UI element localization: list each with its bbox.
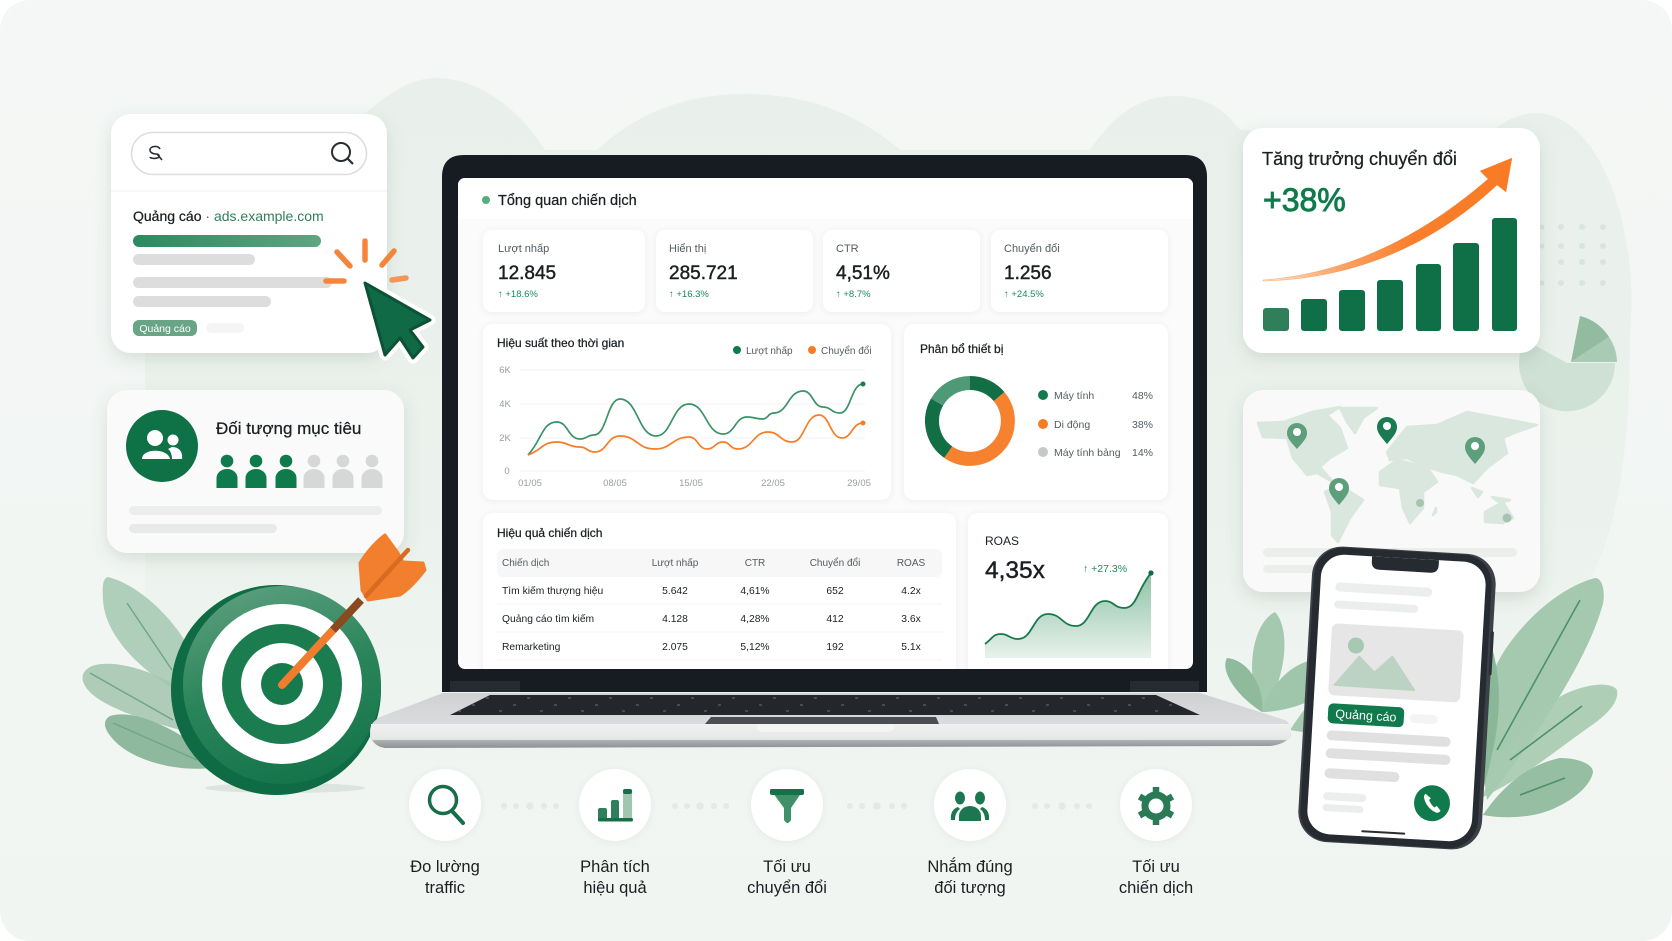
phone ad tag: Quảng cáo xyxy=(1335,707,1397,724)
panel: conversion growth xyxy=(1243,128,1540,353)
table rows: 4.2x xyxy=(901,586,922,597)
KPI: CTR: CTR xyxy=(836,243,859,255)
step: right audience: đối tượng xyxy=(934,879,1006,897)
orange line xyxy=(528,415,866,455)
table header: CTR xyxy=(745,558,765,569)
arrow: growth trend xyxy=(1263,158,1512,281)
table rows: Tìm kiếm thượng hiệu xyxy=(502,585,603,597)
KPI: impressions: ↑ +16.3% xyxy=(669,289,709,300)
axis labels xyxy=(499,365,871,489)
axis labels: 29/05 xyxy=(847,478,871,489)
table rows: 412 xyxy=(826,614,844,625)
icon: magnifier xyxy=(430,786,463,823)
KPI: conversions: 1.256 xyxy=(1004,263,1052,284)
laptop base xyxy=(370,693,1291,748)
table header: ROAS xyxy=(897,558,925,569)
KPI: CTR xyxy=(831,244,972,312)
panel: search ad xyxy=(111,114,387,353)
donut panel: Phân bổ thiết bị xyxy=(920,342,1003,356)
donut legend: 48% xyxy=(1132,390,1153,402)
line chart panel xyxy=(492,337,882,500)
dart xyxy=(282,535,425,685)
KPI: conversions: ↑ +24.5% xyxy=(1004,289,1044,300)
green line xyxy=(528,382,866,455)
step: analyse: Phân tích xyxy=(580,858,650,876)
step: measure traffic: Đo lường xyxy=(410,858,480,876)
chart legend: Lượt nhấp xyxy=(746,345,793,357)
step: optimise campaign: chiến dịch xyxy=(1119,879,1193,897)
table rows: 3.6x xyxy=(901,614,922,625)
chart legend: Chuyển đổi xyxy=(821,345,872,357)
phone image placeholder xyxy=(1328,623,1464,703)
KPI: clicks xyxy=(491,244,637,312)
table rows xyxy=(502,585,922,653)
ad tag xyxy=(133,320,244,336)
KPI: impressions xyxy=(664,243,805,312)
growth title: Tăng trưởng chuyển đổi xyxy=(1262,149,1457,169)
laptop lid xyxy=(442,155,1207,692)
connector dots xyxy=(501,802,1092,810)
donut chart xyxy=(932,383,1008,459)
icon: people xyxy=(951,792,989,821)
step: optimise conversion xyxy=(747,769,827,897)
dashboard screen xyxy=(458,178,1193,683)
icon: cursor arrow xyxy=(365,283,430,358)
growth bars xyxy=(1263,218,1517,331)
KPI: clicks: 12.845 xyxy=(498,263,556,284)
line chart panel: Hiệu suất theo thời gian xyxy=(497,336,624,350)
right big leaves xyxy=(1476,578,1617,817)
icon: gear xyxy=(1140,787,1172,825)
right small leaves xyxy=(1225,612,1320,735)
table header: Lượt nhấp xyxy=(652,557,699,569)
step: analyse xyxy=(579,769,651,897)
table header: Chuyển đổi xyxy=(810,557,860,569)
donut legend xyxy=(1038,390,1153,459)
phone home bar xyxy=(1361,830,1405,835)
table rows: 5.1x xyxy=(901,642,922,653)
icon: audience xyxy=(126,410,198,482)
donut legend: Di động xyxy=(1054,419,1090,431)
table header xyxy=(502,558,925,568)
step: optimise campaign: Tối ưu xyxy=(1132,858,1180,876)
audience people xyxy=(216,455,382,488)
table rows: Quảng cáo tìm kiếm xyxy=(502,613,594,625)
map continents xyxy=(1258,407,1537,542)
table rows: Remarketing xyxy=(502,642,561,653)
KPI: CTR: ↑ +8.7% xyxy=(836,289,871,300)
table rows: 4,28% xyxy=(740,614,770,625)
ROAS panel xyxy=(984,536,1154,658)
icon: call button xyxy=(1413,784,1451,822)
ROAS panel: ROAS xyxy=(985,534,1019,548)
map pins xyxy=(1287,417,1512,522)
step: right audience: Nhắm đúng xyxy=(927,857,1013,876)
ROAS panel: ↑ +27.3% xyxy=(1083,563,1127,575)
ROAS sparkline xyxy=(985,570,1154,658)
table rows: 5,12% xyxy=(740,642,770,653)
step: right audience xyxy=(927,769,1013,897)
panel: target audience xyxy=(107,390,404,553)
axis labels: 22/05 xyxy=(761,478,785,489)
axis labels: 2K xyxy=(499,433,511,444)
icon: bars xyxy=(598,789,633,822)
ad lines xyxy=(133,235,332,307)
icon: click sparks xyxy=(326,241,406,281)
campaign table: Hiệu quả chiến dịch xyxy=(497,526,602,540)
donut legend: Máy tính bảng xyxy=(1054,447,1121,459)
axis labels: 08/05 xyxy=(603,478,627,489)
phone xyxy=(1297,545,1498,851)
target board xyxy=(171,585,381,795)
axis labels: 15/05 xyxy=(679,478,703,489)
growth value: +38% xyxy=(1263,182,1346,218)
ROAS panel: 4,35x xyxy=(985,557,1045,584)
KPI: impressions: 285.721 xyxy=(669,263,738,284)
donut legend: Máy tính xyxy=(1054,390,1094,402)
table rows: 5.642 xyxy=(662,586,688,597)
KPI: CTR: 4,51% xyxy=(836,263,890,284)
KPI: conversions xyxy=(999,243,1160,312)
axis labels: 0 xyxy=(504,466,510,477)
audience title: Đối tượng mục tiêu xyxy=(216,419,361,438)
step: optimise conversion: chuyển đổi xyxy=(747,879,827,897)
table rows: 2.075 xyxy=(662,642,688,653)
step: optimise campaign xyxy=(1119,769,1193,897)
map lines xyxy=(1263,548,1517,573)
table rows: 4,61% xyxy=(740,586,770,597)
KPI: clicks: Lượt nhấp xyxy=(498,243,549,255)
KPI: impressions: Hiển thị xyxy=(669,243,706,255)
left leaves xyxy=(82,577,215,769)
icon: target with dart xyxy=(171,535,425,795)
table header: Chiến dịch xyxy=(502,557,549,569)
dashboard header: Tổng quan chiến dịch xyxy=(498,193,637,209)
table rows: 652 xyxy=(826,586,844,597)
step: measure traffic: traffic xyxy=(425,879,465,897)
campaign table xyxy=(498,527,925,652)
KPI: clicks: ↑ +18.6% xyxy=(498,289,538,300)
ad tag: Quảng cáo xyxy=(139,323,191,335)
step: analyse: hiệu quả xyxy=(583,879,647,897)
axis labels: 4K xyxy=(499,399,511,410)
dashboard header xyxy=(458,178,1193,208)
table rows: 4.128 xyxy=(662,614,688,625)
icon: funnel xyxy=(770,789,804,823)
phone text lines xyxy=(1334,582,1432,614)
axis labels: 01/05 xyxy=(518,478,542,489)
ad headline: Quảng cáo · ads.example.com xyxy=(133,208,324,224)
panel: world map xyxy=(1243,390,1540,592)
phone ad tag xyxy=(1327,703,1438,729)
phone body lines xyxy=(1322,730,1452,818)
dot grid xyxy=(1539,224,1606,286)
step: measure traffic xyxy=(409,769,481,897)
KPI: conversions: Chuyển đổi xyxy=(1004,243,1060,255)
donut legend: 14% xyxy=(1132,447,1153,459)
search bar xyxy=(132,132,366,174)
chart legend xyxy=(733,346,871,356)
laptop xyxy=(370,155,1291,748)
step: optimise conversion: Tối ưu xyxy=(763,858,811,876)
table rows: 192 xyxy=(826,642,844,653)
donut panel xyxy=(912,342,1160,500)
decorative pie chart xyxy=(1519,316,1617,411)
donut legend: 38% xyxy=(1132,419,1153,431)
axis labels: 6K xyxy=(499,365,511,376)
